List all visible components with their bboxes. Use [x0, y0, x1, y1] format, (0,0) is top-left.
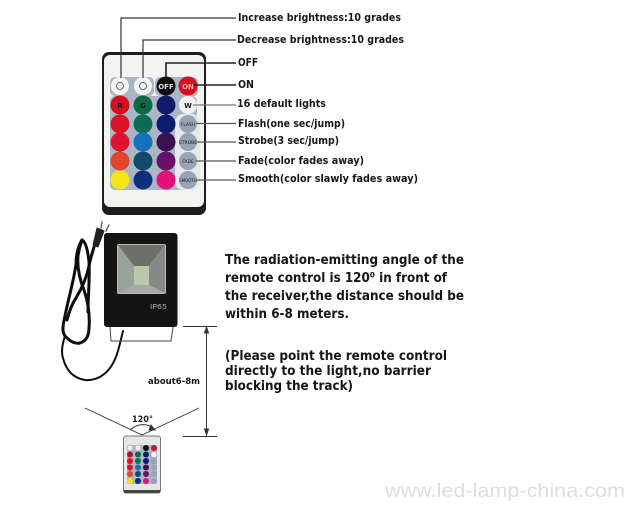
- remote control: ON: [182, 83, 194, 91]
- button labels: ON: [238, 78, 254, 91]
- instructions text: [225, 253, 464, 322]
- watermark: www.led-lamp-china.com: [384, 481, 625, 502]
- remote control: OFF: [158, 83, 174, 91]
- instructions text: the receiver,the distance should be: [225, 289, 464, 304]
- note text: [225, 349, 447, 394]
- button labels: Fade(color fades away): [238, 154, 364, 167]
- remote control: [102, 52, 206, 215]
- flood light: [104, 233, 178, 341]
- angle label: 120°: [132, 415, 153, 425]
- note text: directly to the light,no barrier: [225, 364, 432, 379]
- button labels: [237, 11, 418, 185]
- button labels: Smooth(color slawly fades away): [238, 172, 418, 185]
- remote control: FADE: [182, 159, 194, 165]
- button labels: OFF: [238, 56, 258, 69]
- remote control: G: [140, 102, 146, 110]
- instructions text: The radiation-emitting angle of the: [225, 253, 464, 268]
- note text: blocking the track): [225, 379, 353, 394]
- remote control: SMOOTH: [179, 178, 197, 183]
- button labels: Decrease brightness:10 grades: [237, 33, 404, 46]
- leader lines: [121, 18, 236, 180]
- power cord and plug: [62, 222, 123, 380]
- button labels: Flash(one sec/jump): [238, 117, 345, 130]
- note text: (Please point the remote control: [225, 349, 447, 364]
- angle lines: [85, 408, 199, 435]
- distance label: about6-8m: [148, 377, 200, 387]
- instructions text: remote control is 120⁰ in front of: [225, 271, 447, 286]
- remote control: W: [184, 102, 192, 110]
- small remote: [124, 436, 160, 493]
- instructions text: within 6-8 meters.: [225, 307, 349, 322]
- flood light: IP65: [150, 303, 167, 311]
- distance arrow: [183, 326, 217, 436]
- remote control: FLASH: [181, 122, 195, 128]
- button labels: Increase brightness:10 grades: [238, 11, 401, 24]
- button labels: Strobe(3 sec/jump): [238, 134, 339, 147]
- remote control: STROBE: [179, 140, 197, 146]
- remote control: R: [117, 102, 123, 110]
- button labels: 16 default lights: [237, 97, 326, 110]
